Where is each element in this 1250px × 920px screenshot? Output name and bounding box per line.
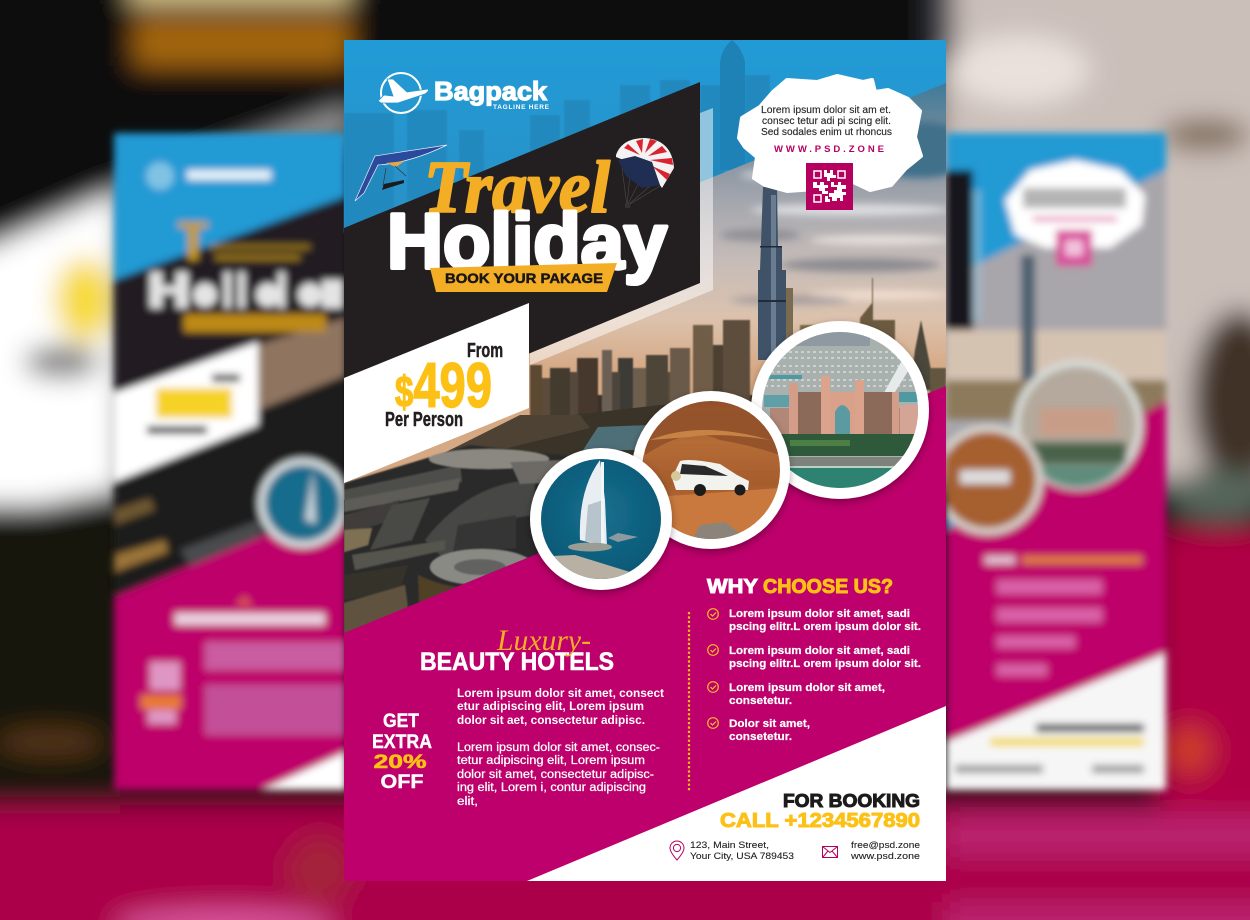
address: 123, Main Street, [690, 840, 769, 851]
checklist: Dolor sit amet, [729, 718, 810, 730]
waterfront and river [344, 400, 760, 640]
checklist: pscing elitr.L orem ipsum dolor sit. [729, 621, 921, 633]
mall rooftops [344, 444, 568, 633]
section: beauty hotels [420, 624, 664, 808]
photo circle: desert [632, 391, 790, 549]
callout text [761, 105, 892, 138]
blue header with faint skyline [344, 40, 946, 340]
headline: Travel: Travel [424, 147, 610, 229]
regular paragraph: dolor sit amet, consectetur adipisc- [457, 769, 654, 781]
offer: extra 20 percent off: EXTRA [372, 732, 432, 753]
offer: extra 20 percent off: 20% [374, 752, 427, 773]
logo [378, 73, 550, 113]
bold paragraph [457, 688, 664, 727]
booking contact [670, 791, 920, 862]
icon: location pin [670, 841, 684, 860]
booking banner [430, 263, 617, 292]
email and web: www.psd.zone [850, 851, 920, 862]
offer: extra 20 percent off: GET [383, 711, 419, 732]
dotted divider [688, 612, 690, 792]
heading accent: CHOOSE US? [763, 576, 893, 598]
white corner panel [527, 706, 946, 881]
website: WWW.PSD.ZONE [774, 144, 884, 155]
address: Your City, USA 789453 [690, 851, 794, 862]
bold paragraph: etur adipiscing elit, Lorem ipsum [457, 701, 644, 713]
address [690, 840, 794, 862]
checklist: Lorem ipsum dolor sit amet, sadi [729, 608, 910, 620]
booking heading: FOR BOOKING [783, 791, 920, 811]
per person label: Per Person [385, 409, 463, 431]
checklist: Lorem ipsum dolor sit amet, [729, 682, 885, 694]
regular paragraph: Lorem ipsum dolor sit amet, consec- [457, 742, 660, 754]
section: why choose us [689, 576, 921, 792]
icon: hang glider [355, 145, 447, 201]
checklist: consetetur. [729, 731, 792, 743]
dark headline panel [344, 82, 700, 430]
booking banner: BOOK YOUR PAKAGE [445, 270, 603, 286]
regular paragraph: ing elit, Lorem i, contur adipiscing [457, 782, 646, 794]
offer: extra 20 percent off: OFF [380, 772, 424, 793]
checklist: Lorem ipsum dolor sit amet, sadi [729, 645, 910, 657]
checklist: consetetur. [729, 695, 792, 707]
callout text: consec tetur adi pi scing elit. [762, 116, 891, 127]
photo circle: burj al arab [530, 448, 672, 590]
cloud callout [739, 76, 921, 210]
left blurred flyer [114, 133, 348, 790]
right blurred flyer [933, 133, 1166, 790]
icon: white suv [671, 460, 749, 496]
icon: envelope [822, 846, 838, 858]
checklist: pscing elitr.L orem ipsum dolor sit. [729, 658, 921, 670]
tagline: TAGLINE HERE [493, 104, 550, 111]
email and web: free@psd.zone [851, 840, 920, 851]
price amount: $499 [395, 351, 492, 421]
regular paragraph: tetur adipiscing elit, Lorem ipsum [457, 755, 645, 767]
photo circle: atlantis [751, 321, 929, 499]
from label: From [467, 340, 503, 362]
translucent strip [530, 108, 713, 365]
checklist [708, 608, 921, 743]
icon: parachute [616, 138, 674, 208]
heading: WHY [707, 576, 759, 598]
heading: BEAUTY HOTELS [420, 648, 614, 676]
headline: Holiday: Holiday [387, 197, 667, 285]
brand name: Bagpack [434, 76, 548, 106]
price panel [344, 303, 529, 483]
email and web [850, 840, 920, 862]
burj tower [758, 187, 793, 360]
luxury script: Luxury- [496, 624, 591, 657]
regular paragraph [457, 742, 660, 808]
phone number: CALL +1234567890 [720, 810, 920, 832]
skyline buildings [529, 278, 946, 415]
callout text: Lorem ipsum dolor sit am et. [761, 105, 891, 116]
main flyer [344, 40, 980, 881]
flyer base panel [344, 40, 946, 881]
magenta diagonal panel [344, 386, 946, 881]
bold paragraph: Lorem ipsum dolor sit amet, consect [457, 688, 664, 700]
callout text: Sed sodales enim ut rhoncus [761, 127, 892, 138]
QR code [806, 163, 853, 210]
bold paragraph: dolor sit aet, consectetur adipisc. [457, 715, 645, 727]
regular paragraph: elit, [457, 796, 478, 808]
offer: extra 20 percent off [372, 711, 432, 793]
city photo [344, 80, 980, 640]
